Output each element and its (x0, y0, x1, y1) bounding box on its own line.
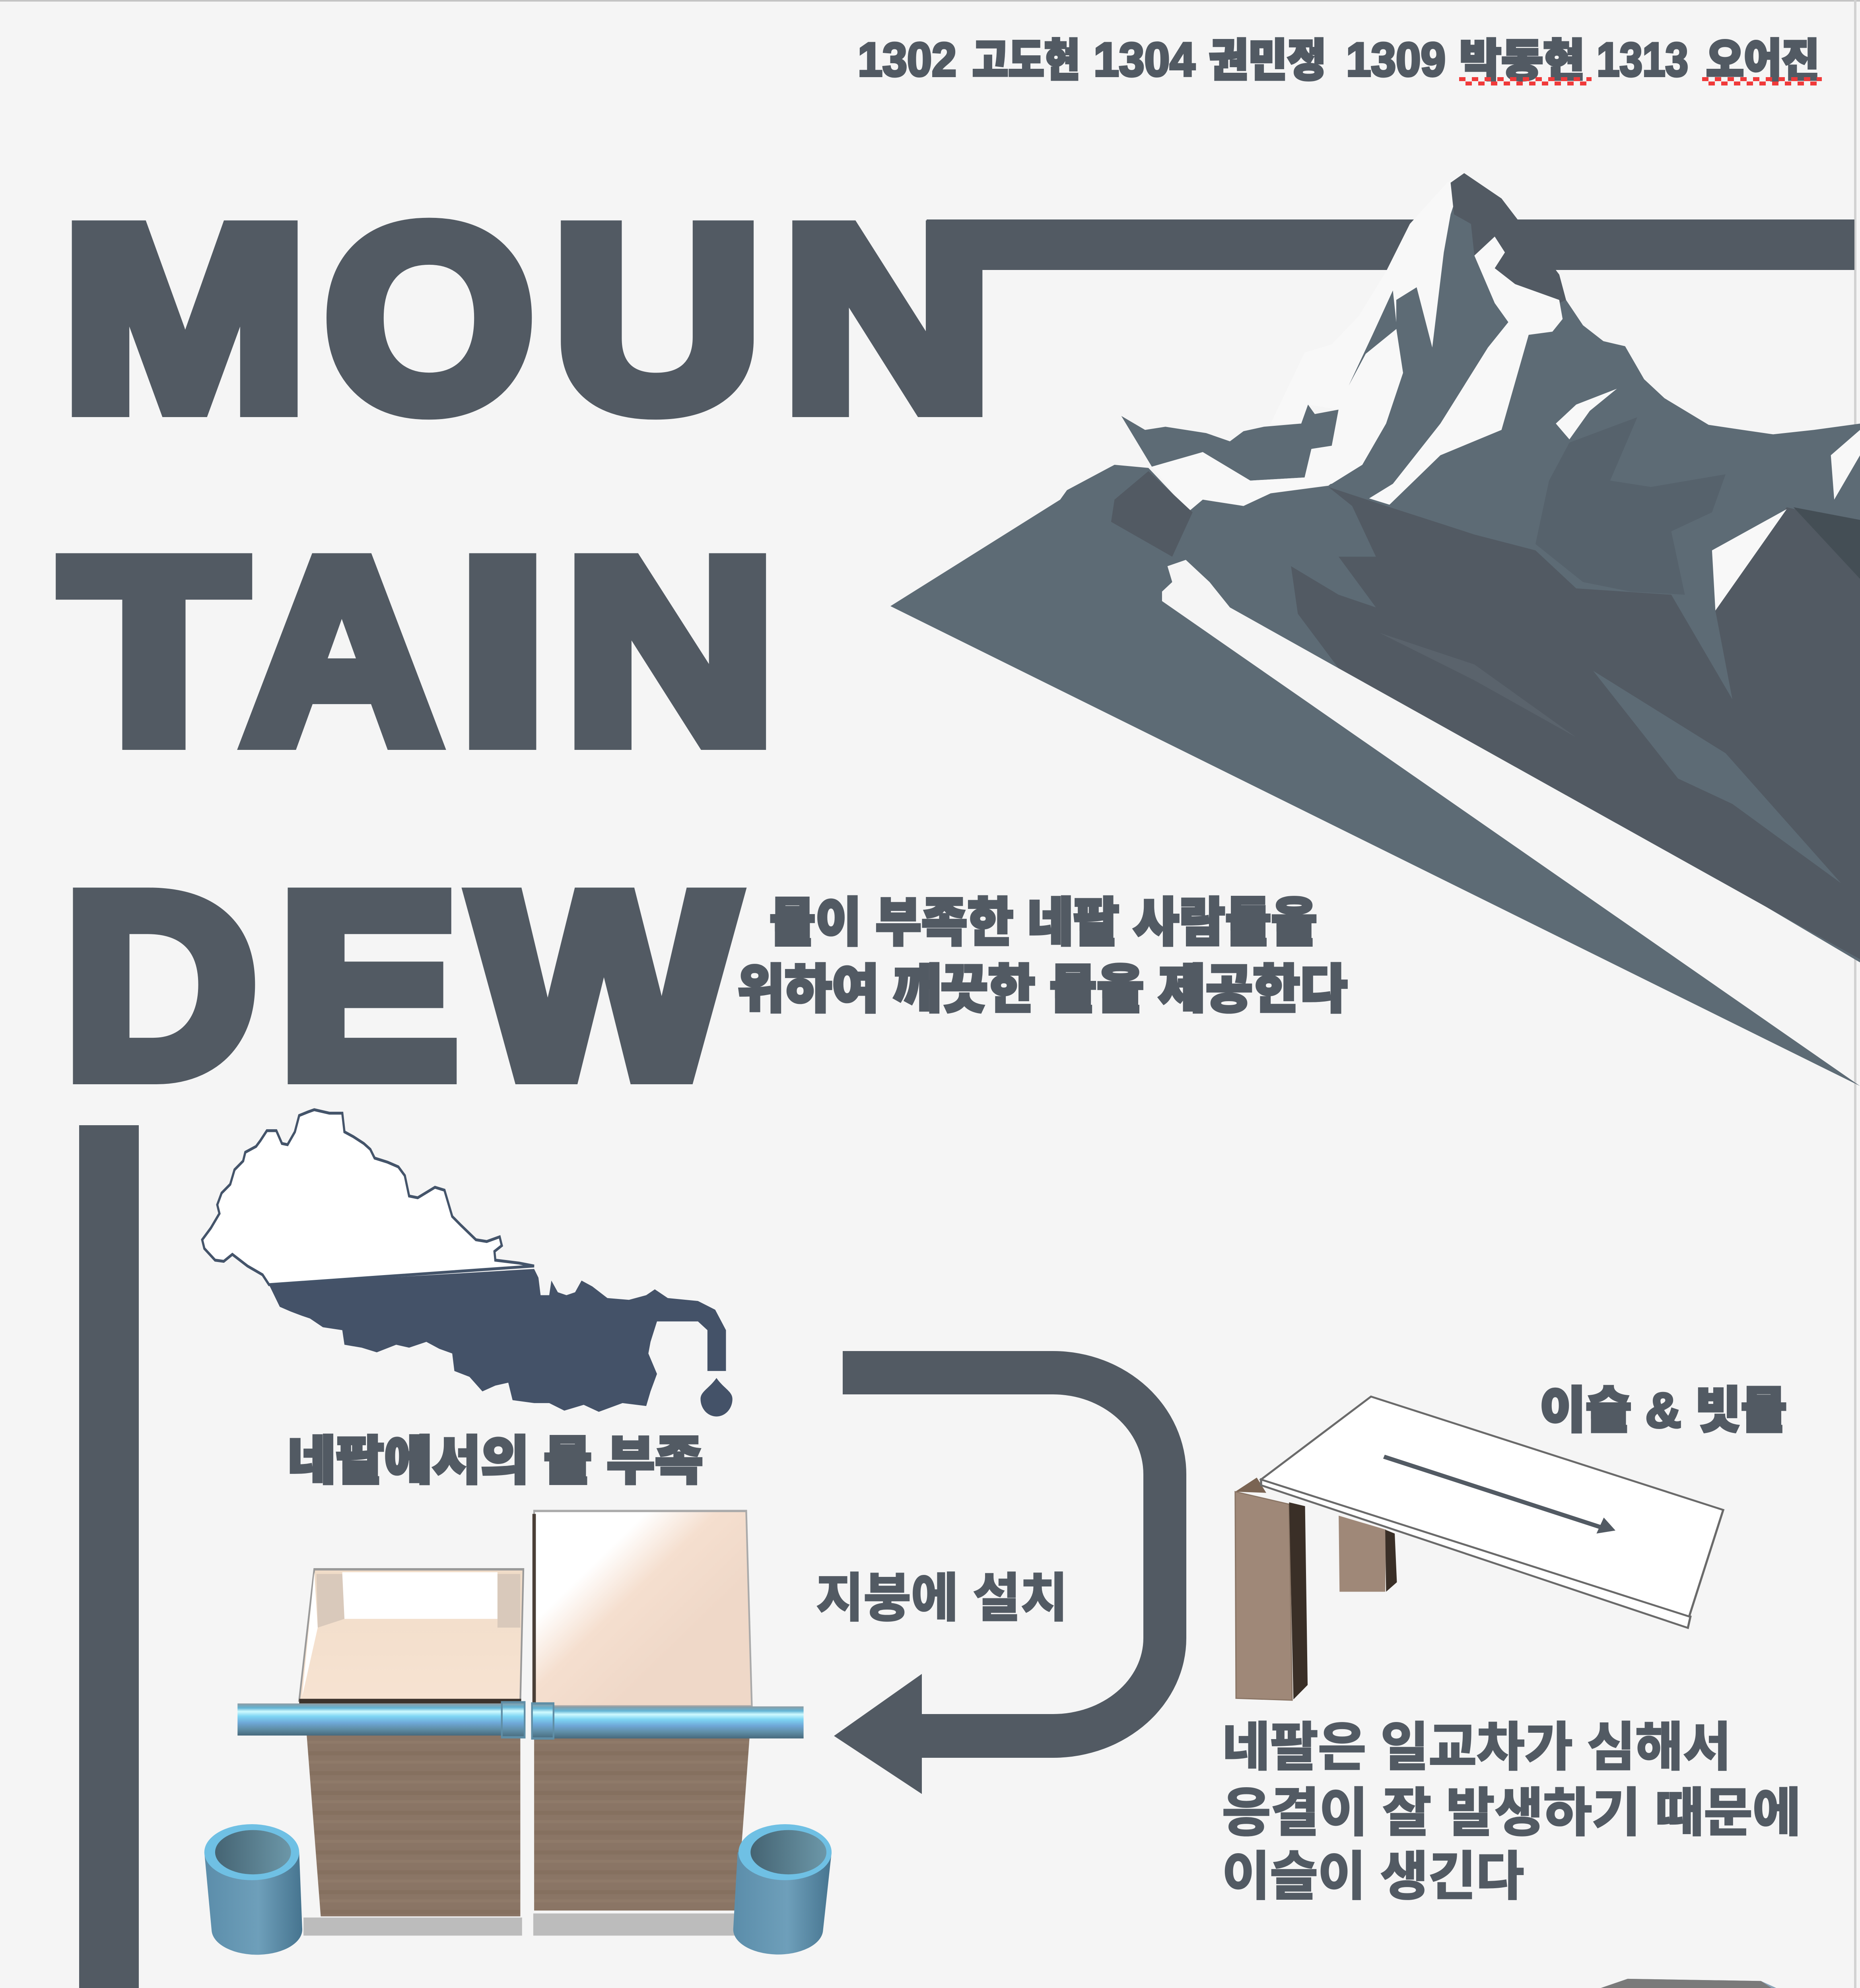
authors line: 고도현 (972, 36, 1080, 85)
subtitle: 물이 부족한 네팔 사람들을 (770, 893, 1317, 952)
icon: Nepal map as a water tap (202, 1110, 733, 1417)
title line: MOUN: M (62, 173, 307, 464)
arrow on panel (1384, 1457, 1615, 1534)
authors line: 오어진 (1706, 36, 1819, 85)
right box (533, 1511, 752, 1910)
explanation paragraph: 네팔은 일교차가 심해서 (1222, 1718, 1731, 1776)
subtitle: 위하여 깨끗한 물을 제공한다 (737, 960, 1347, 1019)
authors line: 1313 (1597, 33, 1688, 86)
explanation paragraph (1222, 1718, 1801, 1906)
right bucket (733, 1824, 832, 1955)
authors line: 권민정 (1209, 36, 1326, 85)
title line: DEW: D (64, 840, 257, 1131)
explanation paragraph: 응결이 잘 발생하기 때문에 (1222, 1784, 1801, 1842)
title connector bar (927, 219, 1854, 270)
authors line: 1302 (858, 33, 956, 86)
authors line (858, 33, 1822, 86)
portrait: Nepali woman (1130, 1979, 1854, 1988)
title line: MOUN: U (553, 173, 762, 464)
authors line: 박동현 (1460, 36, 1585, 85)
mountain illustration (890, 173, 1860, 1086)
title line: MOUN: N (783, 173, 992, 464)
title line: DEW: E (279, 840, 458, 1131)
condensation panel model (1235, 1396, 1723, 1700)
authors line: 1309 (1346, 33, 1446, 86)
label: install on the roof: 지붕에 설치 (816, 1569, 1068, 1627)
title line: TAIN: N (565, 505, 776, 796)
title (62, 173, 992, 1131)
title line: DEW: W (473, 840, 737, 1131)
title line: TAIN: T (62, 505, 245, 796)
authors line: 1304 (1094, 33, 1195, 86)
left box (299, 1569, 523, 1916)
title line: MOUN: O (325, 173, 534, 464)
long L arrow to the woman (79, 1125, 1326, 1988)
roof collector model (204, 1511, 832, 1955)
caption: water shortage in Nepal: 네팔에서의 물 부족 (288, 1432, 703, 1490)
subtitle (737, 893, 1347, 1019)
U-shaped arrow to roof (834, 1351, 1186, 1794)
left bucket (204, 1824, 302, 1955)
shadow (303, 1913, 735, 1936)
pipes (237, 1702, 804, 1738)
title line: TAIN: I (459, 505, 547, 796)
explanation paragraph: 이슬이 생긴다 (1222, 1847, 1524, 1906)
label: dew and rain: 이슬 & 빗물 (1540, 1383, 1787, 1438)
title line: TAIN: A (243, 505, 440, 796)
